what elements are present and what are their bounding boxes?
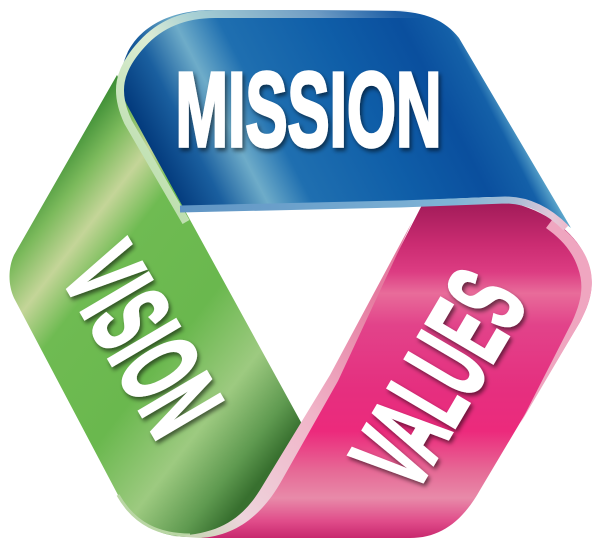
panel: mission blue band [120,10,571,228]
rim: blue left and top edge [120,14,420,222]
rim: pink right edge [520,220,592,424]
rim: blue lower edge [180,200,566,228]
rim: pink left edge [172,222,412,538]
panel: vision green band [10,75,302,537]
panel: values pink band [172,200,592,538]
